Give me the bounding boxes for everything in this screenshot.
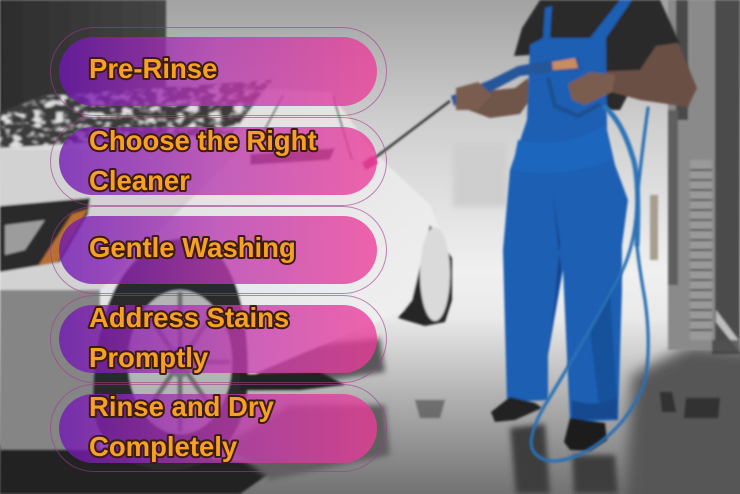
wet floor [0,320,740,494]
pill outline [50,28,386,116]
headlight strip [38,209,88,266]
pill background [59,216,377,284]
lance nozzle [362,156,378,170]
panel: step 1 Pre-Rinse [50,28,386,116]
worker [362,0,697,451]
sill shadow [240,372,345,390]
label: Pre-Rinse [89,53,217,84]
spray gun grip [548,78,600,116]
orange handle [552,58,578,70]
floor puddles [415,392,720,418]
left arm [458,78,530,118]
lance [372,101,450,160]
headlight [0,198,90,272]
overalls [503,0,632,422]
car lower bumper [0,250,100,450]
side mirror [250,148,335,165]
car body [0,85,452,450]
label: Cleaner [89,165,190,196]
pill background [59,305,377,373]
panel: step 5 Rinse and Dry Completely [50,384,386,472]
wet streaks behind panels [250,338,385,388]
label: Rinse and Dry [89,391,275,422]
pill outline [50,206,386,294]
pill background [59,394,377,463]
right floor dark area [625,345,740,494]
panel: step 3 Gentle Washing [50,206,386,294]
louvered door [690,160,712,340]
pill outline [50,296,386,382]
hood shading [0,150,240,290]
windshield [0,80,272,148]
windshield foam [0,80,272,148]
left shoe [491,397,542,422]
panel: step 4 Address Stains Promptly [50,296,386,382]
spray gun body [451,58,582,106]
right arm [568,43,697,108]
label: Address Stains [89,302,289,333]
white car [0,80,452,470]
front rim [128,290,232,434]
t-shirt [514,0,680,110]
hands [456,72,615,110]
pill background [59,127,377,195]
pill background [59,37,377,106]
panel: step 2 Choose the Right Cleaner [50,118,386,206]
label: Choose the Right [89,125,317,156]
blue hose [531,107,648,461]
rear tyre [398,225,452,326]
door lines [262,95,352,160]
pill outline [50,118,386,206]
label: Completely [89,431,238,462]
trouser shading [548,195,561,355]
background building windows [453,143,507,207]
front tyre and wheel arch [93,238,248,470]
right shoe [564,418,607,451]
label: Gentle Washing [89,232,296,263]
garage wall at right [650,0,740,354]
pill outline [50,384,386,472]
label: Promptly [89,342,209,373]
dark upper left wall [0,0,166,130]
shoe reflections [510,424,618,494]
rear rim [420,227,450,321]
bottom left dark ground [0,442,280,494]
